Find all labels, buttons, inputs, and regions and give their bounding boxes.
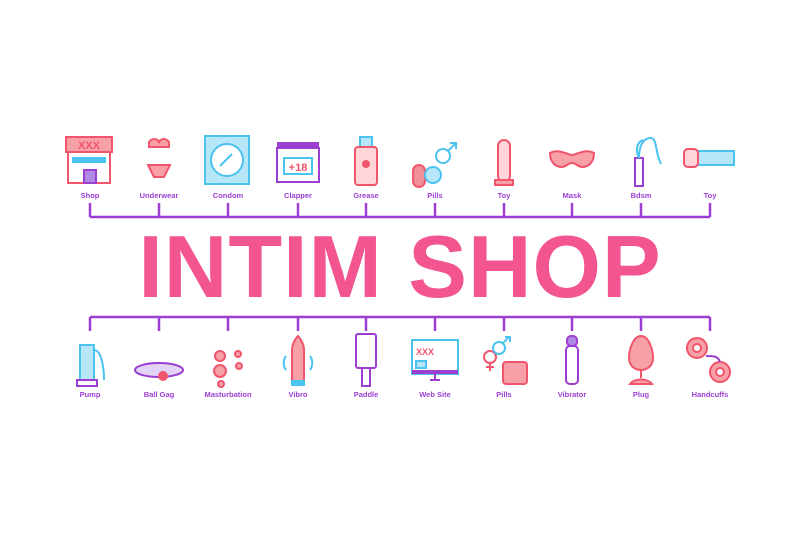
top labels: Condom [213, 191, 244, 200]
bottom labels: Pills [496, 390, 512, 399]
icon: clapper [277, 142, 319, 182]
top labels: Mask [563, 191, 582, 200]
icon: shop: XXX [78, 140, 101, 152]
icon: ball gag [135, 363, 183, 381]
icon: toy [495, 140, 513, 185]
bottom labels: Vibrator [558, 390, 586, 399]
icon: mask [550, 151, 594, 167]
icon: web site [412, 340, 458, 380]
icon: plug [629, 336, 653, 384]
title: INTIM SHOP [138, 217, 662, 316]
top labels [81, 191, 717, 200]
top labels: Pills [427, 191, 443, 200]
top labels: Clapper [284, 191, 312, 200]
top labels: Shop [81, 191, 100, 200]
icon: condom [205, 136, 249, 184]
icon: underwear [148, 139, 170, 177]
icon: vibrator [566, 336, 578, 384]
icon: vibro [284, 336, 312, 386]
icon: web site: XXX [416, 347, 434, 357]
top labels: Toy [498, 191, 511, 200]
bottom labels [80, 390, 728, 399]
bottom labels: Masturbation [204, 390, 252, 399]
icon: beads [214, 351, 242, 387]
icon: bdsm [635, 138, 661, 186]
icon: grease [355, 137, 377, 185]
bottom icons [77, 334, 730, 387]
top labels: Grease [353, 191, 379, 200]
top labels: Underwear [140, 191, 178, 200]
bottom labels: Ball Gag [144, 390, 175, 399]
top icons [66, 136, 734, 187]
icon: pills 2 [484, 337, 527, 384]
connector: bottom [90, 317, 710, 331]
bottom labels: Web Site [419, 390, 451, 399]
bottom labels: Vibro [288, 390, 308, 399]
bottom labels: Handcuffs [692, 390, 728, 399]
icon: paddle [356, 334, 376, 386]
bottom labels: Plug [633, 390, 650, 399]
icon: clapper: +18 [289, 162, 307, 174]
icon: pump [77, 345, 104, 386]
top labels: Bdsm [631, 191, 652, 200]
connector: top [90, 203, 710, 217]
top labels: Toy [704, 191, 717, 200]
icon: shop [66, 137, 112, 183]
icon: handcuffs [687, 338, 730, 382]
icon: toy 2 [684, 149, 734, 167]
bottom labels: Pump [80, 390, 101, 399]
icon: pills [413, 143, 456, 187]
bottom labels: Paddle [354, 390, 378, 399]
